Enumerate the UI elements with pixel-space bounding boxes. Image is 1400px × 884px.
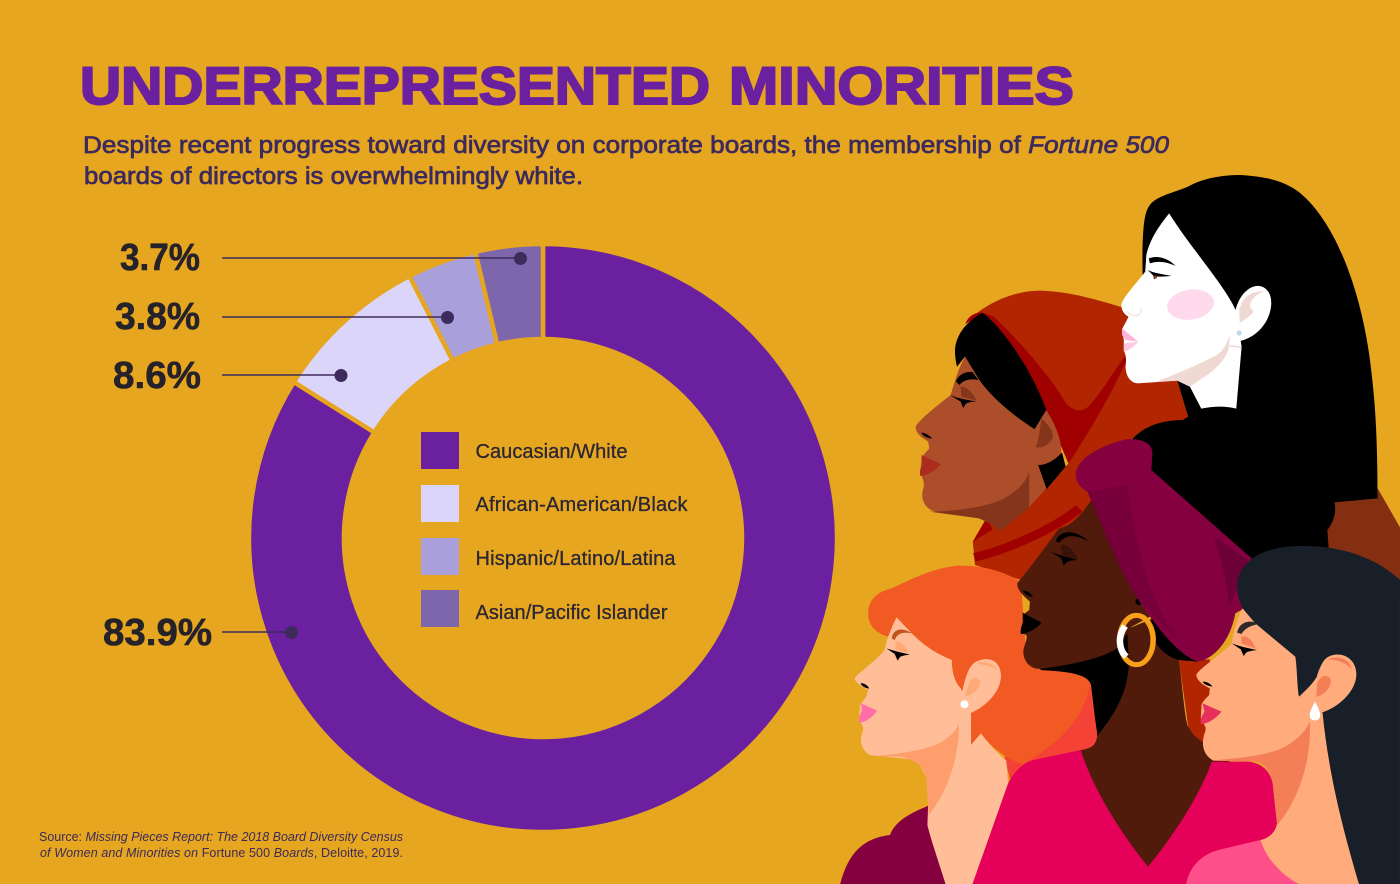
small ear mark xyxy=(1135,598,1143,605)
dark face xyxy=(1017,497,1150,669)
neck shadow xyxy=(1212,722,1310,825)
neck and chest xyxy=(1048,617,1230,877)
neck shadow xyxy=(1156,333,1230,387)
source note: Source: Missing Pieces Report: The 2018 Board Diversity Census xyxy=(39,830,403,844)
long black hair xyxy=(1133,175,1378,603)
hair lighter section xyxy=(1023,685,1097,764)
lips xyxy=(1201,703,1221,724)
nostril xyxy=(1203,682,1212,687)
legend item: African-American/Black: African-American/Black xyxy=(476,494,688,516)
label 3.8% xyxy=(115,296,454,338)
woman: headscarf, brown skin xyxy=(916,313,1066,531)
brow xyxy=(956,372,979,385)
face and neck xyxy=(916,357,1061,530)
source note: of Women and Minorities on Fortune 500 Boards, Deloitte, 2019. xyxy=(40,846,403,860)
eye xyxy=(886,648,910,661)
title: UNDERREPRESENTED xyxy=(80,57,710,116)
eyeshadow xyxy=(961,386,976,401)
headscarf xyxy=(966,291,1188,580)
turban xyxy=(1076,439,1259,662)
segment: Asian/Pacific Islander 3.7% xyxy=(475,244,543,344)
hoop earring xyxy=(1120,615,1153,665)
donut chart xyxy=(249,244,837,832)
navy hair xyxy=(1237,546,1400,884)
illustration: five women in profile xyxy=(840,175,1400,884)
nostril xyxy=(861,683,869,689)
woman: long black hair and headscarf (back) xyxy=(966,175,1400,603)
label 83.9%: 83.9% xyxy=(103,612,212,654)
eyeshadow xyxy=(895,641,908,653)
turban bottom black xyxy=(1150,618,1198,662)
source note xyxy=(39,830,403,860)
leader lines and data labels xyxy=(103,237,527,654)
subtitle text block: Despite recent progress toward diversity on corporate boards, the membership of Fortune 500 xyxy=(83,132,1169,159)
brow xyxy=(892,629,912,640)
title: MINORITIES xyxy=(729,57,1074,116)
lips xyxy=(920,455,941,476)
legend xyxy=(421,432,688,627)
lower red hair accent xyxy=(1004,757,1034,787)
teardrop earring xyxy=(1310,702,1320,720)
woman: orange hair, light skin xyxy=(840,617,1008,884)
title xyxy=(80,57,1074,116)
segment: Caucasian/White 83.9% xyxy=(249,244,837,832)
ear xyxy=(961,659,1001,713)
neck shadow xyxy=(929,472,1029,531)
lips xyxy=(1122,328,1138,342)
turban darker folds xyxy=(1087,485,1179,640)
brow xyxy=(1237,622,1259,634)
face and neck xyxy=(855,617,1008,884)
red hair behind right woman xyxy=(1179,659,1215,743)
ear inner xyxy=(1036,418,1053,448)
ear xyxy=(1311,655,1356,713)
legend item: Asian/Pacific Islander xyxy=(421,590,668,627)
pearl earring xyxy=(960,700,968,708)
neck shadow xyxy=(870,723,959,815)
label 83.9% xyxy=(103,612,298,654)
brow xyxy=(1056,532,1089,543)
lips xyxy=(859,703,877,723)
segment: African-American/Black 8.6% xyxy=(294,276,453,432)
label 8.6%: 8.6% xyxy=(113,355,201,397)
eye xyxy=(1051,552,1077,566)
ear xyxy=(1229,286,1271,342)
segment: Hispanic/Latino/Latina 3.8% xyxy=(410,252,497,361)
pale face and neck xyxy=(1121,213,1242,409)
nostril xyxy=(921,433,932,439)
woman: turban, dark skin xyxy=(868,439,1259,877)
pink shirt xyxy=(972,750,1277,884)
eye xyxy=(1232,643,1257,656)
scarf lower stripes xyxy=(973,518,993,542)
blush xyxy=(1165,286,1217,323)
black behind neck xyxy=(1036,453,1066,489)
black shadow under jaw xyxy=(1037,633,1129,738)
eyeshadow xyxy=(1241,636,1255,648)
legend item: Caucasian/White xyxy=(421,432,628,469)
maroon shirt xyxy=(840,806,946,884)
lips xyxy=(1021,613,1042,634)
eye xyxy=(950,395,976,408)
shoulder xyxy=(1315,488,1400,597)
face and neck xyxy=(1196,608,1359,884)
nose xyxy=(1127,308,1141,316)
pink top xyxy=(1186,840,1299,884)
label 3.8%: 3.8% xyxy=(115,296,200,338)
subtitle text block xyxy=(83,132,1169,190)
subtitle text block: boards of directors is overwhelmingly white. xyxy=(84,163,583,190)
shadow of eye xyxy=(1061,545,1078,560)
label 3.7% xyxy=(120,237,527,279)
label 3.7%: 3.7% xyxy=(120,237,200,279)
legend item: Asian/Pacific Islander: Asian/Pacific Islander xyxy=(476,602,668,624)
nostril xyxy=(1023,591,1033,597)
legend item: Caucasian/White: Caucasian/White xyxy=(476,441,628,463)
legend item: Hispanic/Latino/Latina: Hispanic/Latino/Latina xyxy=(476,548,676,570)
headscarf fold xyxy=(966,312,1127,463)
woman: long navy hair, peach skin xyxy=(1186,546,1400,884)
legend item: African-American/Black xyxy=(421,485,688,522)
earring xyxy=(1237,330,1242,336)
orange-haired woman: hair xyxy=(868,566,1097,764)
black hair under scarf xyxy=(955,313,1046,429)
label 8.6% xyxy=(113,355,348,397)
brow and eye xyxy=(1149,257,1176,266)
legend item: Hispanic/Latino/Latina xyxy=(421,538,676,575)
